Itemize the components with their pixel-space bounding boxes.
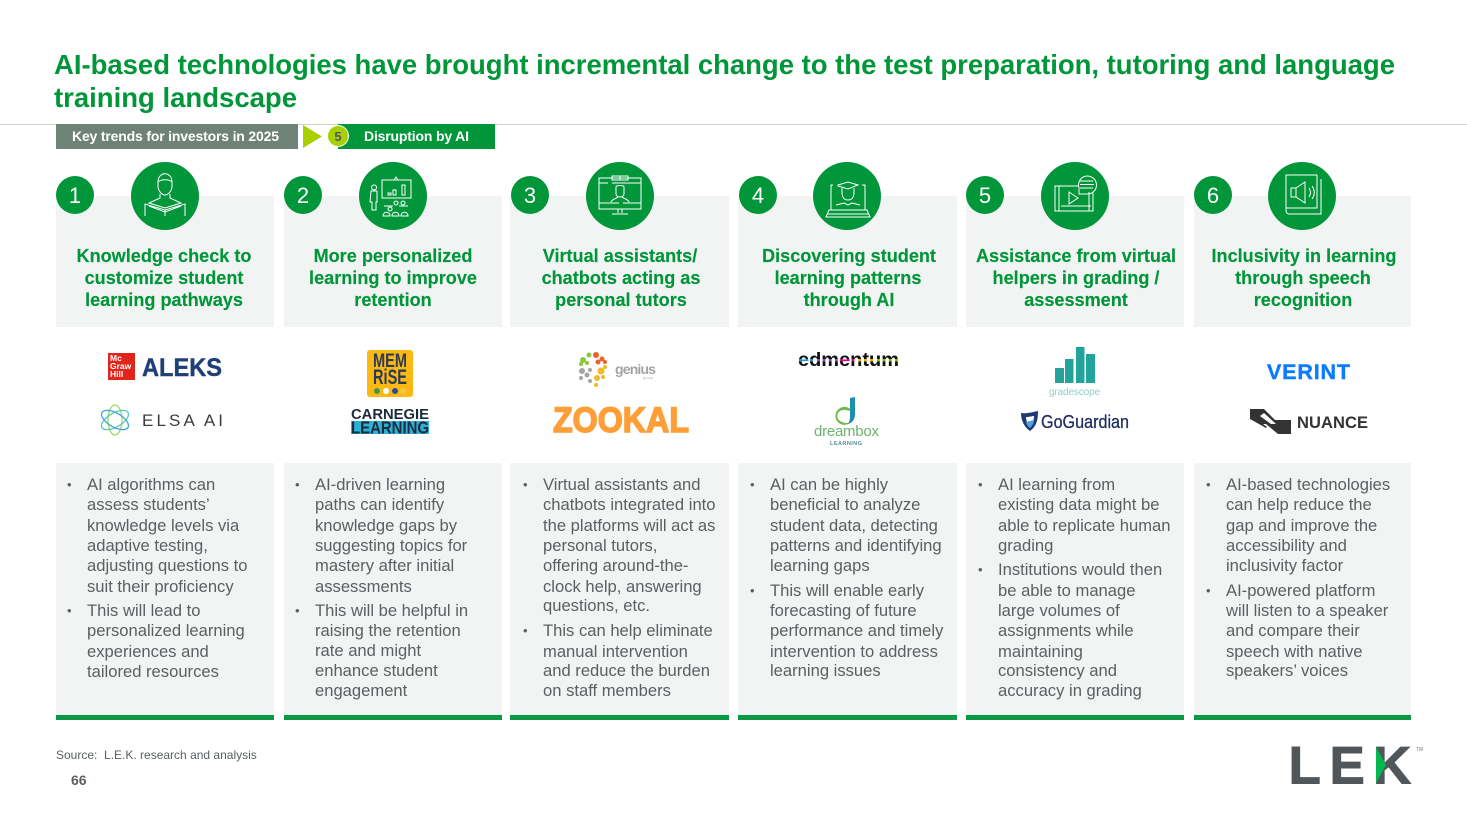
bullets: gap and improve the (1226, 516, 1377, 535)
heading (542, 246, 700, 310)
bullets: • (978, 477, 983, 492)
logo: Carnegie Learning: CARNEGIE (351, 407, 429, 423)
bullets: clock help, answering (543, 577, 702, 596)
bullets: speech with native (1226, 642, 1363, 661)
bullets: AI algorithms can (87, 475, 215, 494)
number 2 (284, 176, 322, 214)
heading: Discovering student (762, 246, 936, 266)
tracker: disruption by AI: 5 (334, 129, 342, 144)
tracker: key trends: Key trends for investors in 2025 (72, 128, 279, 144)
heading: chatbots acting as (542, 268, 700, 288)
bullets: suit their proficiency (87, 577, 234, 596)
panel: text 3 (510, 463, 729, 720)
bullets: • (523, 477, 528, 492)
bullets: assignments while (998, 621, 1134, 640)
bullets: • (295, 603, 300, 618)
heading: Assistance from virtual (976, 246, 1176, 266)
bullets: rate and might (315, 641, 421, 660)
logo: Genius group: group (643, 375, 654, 380)
logo: Gradescope: gradescope (1049, 387, 1100, 398)
logo: LEK: TM (1416, 747, 1423, 753)
icon: audio book (1268, 162, 1336, 230)
bullets: adjusting questions to (87, 556, 248, 575)
bullets (1206, 475, 1390, 680)
logo: McGraw Hill ALEKS (108, 353, 222, 382)
bullets: grading (998, 536, 1053, 555)
page number: 66 (71, 772, 87, 788)
logo: Genius group: genius (615, 361, 656, 377)
bullets: tailored resources (87, 662, 219, 681)
logo: Gradescope (1049, 347, 1100, 398)
bullets: large volumes of (998, 601, 1120, 620)
number 5 (966, 176, 1004, 214)
icon: classroom (359, 162, 427, 230)
bullets: • (978, 562, 983, 577)
heading (1211, 246, 1397, 310)
logo: Nuance: NUANCE (1297, 414, 1368, 432)
logo: Carnegie Learning (351, 407, 429, 438)
heading (77, 246, 251, 310)
number 5: 5 (979, 183, 991, 208)
bullets: • (750, 477, 755, 492)
heading: recognition (1254, 290, 1352, 310)
heading (976, 246, 1176, 310)
bullets: • (523, 623, 528, 638)
logo: DreamBox Learning: LEARNING (830, 441, 862, 447)
icon: graduate on laptop (813, 162, 881, 230)
heading: Inclusivity in learning (1211, 246, 1397, 266)
number 4 (739, 176, 777, 214)
number 6 (1194, 176, 1232, 214)
logo: Edmentum: edmentum (798, 350, 899, 371)
logo: Genius group (579, 352, 656, 387)
heading: Virtual assistants/ (543, 246, 697, 266)
panel: text 1 (56, 463, 274, 720)
bullets: on staff members (543, 681, 671, 700)
title: AI-based technologies have brought incremental change to the test preparation, tutoring and language (54, 49, 1395, 80)
bullets: paths can identify (315, 495, 445, 514)
bullets: assess students’ (87, 495, 210, 514)
title (54, 49, 1395, 113)
bullets: AI-driven learning (315, 475, 445, 494)
bullets: • (1206, 477, 1211, 492)
title: training landscape (54, 82, 297, 113)
panel: card 3 (510, 162, 729, 327)
heading: through speech (1235, 268, 1371, 288)
logo: LEK: LEK (1288, 736, 1411, 796)
logo: Memrise: MEM (373, 351, 407, 372)
number 4: 4 (752, 183, 764, 208)
bullets: • (295, 477, 300, 492)
logo: Memrise: RiSE (373, 366, 407, 389)
tracker: disruption by AI: Disruption by AI (364, 128, 469, 144)
bullets: knowledge levels via (87, 516, 240, 535)
panel: card 1 (56, 162, 274, 327)
heading: retention (354, 290, 432, 310)
bullets: • (750, 583, 755, 598)
logo: DreamBox Learning: dreambox (814, 423, 880, 440)
logo: Verint: VERINT (1267, 360, 1350, 384)
number 1: 1 (69, 183, 81, 208)
bullets: inclusivity factor (1226, 556, 1344, 575)
bullets: • (67, 477, 72, 492)
bullets: offering around-the- (543, 556, 688, 575)
logo: Carnegie Learning: LEARNING (351, 418, 429, 438)
bullets: This will enable early (770, 581, 925, 600)
icon: video and chat bubble (1041, 162, 1109, 230)
logo: ELSA AI (99, 405, 223, 435)
bullets: be able to manage (998, 581, 1135, 600)
bullets: enhance student (315, 661, 438, 680)
bullets: the platforms will act as (543, 516, 715, 535)
bullets: patterns and identifying (770, 536, 942, 555)
bullets: This will lead to (87, 601, 200, 620)
bullets (978, 475, 1171, 700)
source note: Source: L.E.K. research and analysis (56, 748, 257, 762)
number 1 (56, 176, 94, 214)
bullets: experiences and (87, 642, 209, 661)
heading (762, 246, 936, 310)
panel: card 4 (738, 162, 957, 327)
panel: card 2 (284, 162, 502, 327)
number 2: 2 (297, 183, 309, 208)
bullets: Institutions would then (998, 560, 1162, 579)
logo: McGraw Hill ALEKS: Graw (110, 361, 132, 371)
bullets (67, 475, 248, 681)
bullets: student data, detecting (770, 516, 938, 535)
bullets: and reduce the burden (543, 661, 710, 680)
heading: through AI (804, 290, 894, 310)
bullets: adaptive testing, (87, 536, 208, 555)
bullets: This can help eliminate (543, 621, 713, 640)
bullets: • (1206, 583, 1211, 598)
bullets: personal tutors, (543, 536, 657, 555)
logo: Nuance (1250, 409, 1368, 434)
bullets: accuracy in grading (998, 681, 1142, 700)
tracker: key trends (56, 124, 298, 149)
bullets: accessibility and (1226, 536, 1347, 555)
heading: learning patterns (775, 268, 921, 288)
number 6: 6 (1207, 183, 1219, 208)
icon: virtual assistant screen (586, 162, 654, 230)
heading: helpers in grading / (993, 268, 1159, 288)
bullets: assessments (315, 577, 412, 596)
bullets: This will be helpful in (315, 601, 468, 620)
logo: McGraw Hill ALEKS: Hill (110, 369, 123, 379)
logo: McGraw Hill ALEKS: Mc (110, 353, 122, 363)
heading (309, 246, 477, 310)
heading: More personalized (314, 246, 472, 266)
panel: card 6 (1194, 162, 1411, 327)
bullets: personalized learning (87, 621, 245, 640)
bullets: existing data might be (998, 495, 1159, 514)
bullets: able to replicate human (998, 516, 1171, 535)
heading: assessment (1024, 290, 1128, 310)
heading: learning to improve (309, 268, 477, 288)
bullets: learning issues (770, 661, 881, 680)
logo: DreamBox Learning (814, 397, 880, 447)
tracker: disruption by AI (303, 124, 495, 149)
bullets: questions, etc. (543, 596, 650, 615)
bullets: maintaining (998, 642, 1083, 661)
bullets: learning gaps (770, 556, 870, 575)
icon: student reading (131, 162, 199, 230)
bullets: AI-powered platform (1226, 581, 1375, 600)
bullets: mastery after initial (315, 556, 454, 575)
bullets: beneficial to analyze (770, 495, 920, 514)
logo: McGraw Hill ALEKS: ALEKS (142, 354, 222, 382)
bullets: • (67, 603, 72, 618)
bullets (295, 475, 468, 700)
logo: ELSA AI: ELSA AI (142, 411, 223, 430)
heading: customize student (85, 268, 243, 288)
panel: text 5 (966, 463, 1184, 720)
panel: text 4 (738, 463, 957, 720)
number 3: 3 (524, 183, 536, 208)
bullets: forecasting of future (770, 601, 917, 620)
bullets: speakers’ voices (1226, 661, 1348, 680)
bullets: and compare their (1226, 621, 1360, 640)
bullets (523, 475, 716, 700)
logo: Memrise (367, 350, 413, 397)
bullets: AI-based technologies (1226, 475, 1390, 494)
bullets: AI learning from (998, 475, 1115, 494)
number 3 (511, 176, 549, 214)
bullets: manual intervention (543, 642, 688, 661)
bullets: suggesting topics for (315, 536, 468, 555)
logo: Zookal: ZOOKAL (553, 401, 689, 440)
bullets (750, 475, 944, 680)
bullets: knowledge gaps by (315, 516, 458, 535)
bullets: AI can be highly (770, 475, 889, 494)
bullets: performance and timely (770, 621, 944, 640)
panel: text 2 (284, 463, 502, 720)
bullets: raising the retention (315, 621, 461, 640)
bullets: intervention to address (770, 642, 938, 661)
panel: card 5 (966, 162, 1184, 327)
heading: personal tutors (555, 290, 687, 310)
bullets: consistency and (998, 661, 1117, 680)
bullets: chatbots integrated into (543, 495, 716, 514)
bullets: will listen to a speaker (1225, 601, 1389, 620)
heading: learning pathways (85, 290, 243, 310)
panel: text 6 (1194, 463, 1411, 720)
bullets: Virtual assistants and (543, 475, 700, 494)
heading: Knowledge check to (77, 246, 251, 266)
logo: GoGuardian: GoGuardian (1041, 412, 1129, 432)
bullets: engagement (315, 681, 408, 700)
bullets: can help reduce the (1226, 495, 1372, 514)
